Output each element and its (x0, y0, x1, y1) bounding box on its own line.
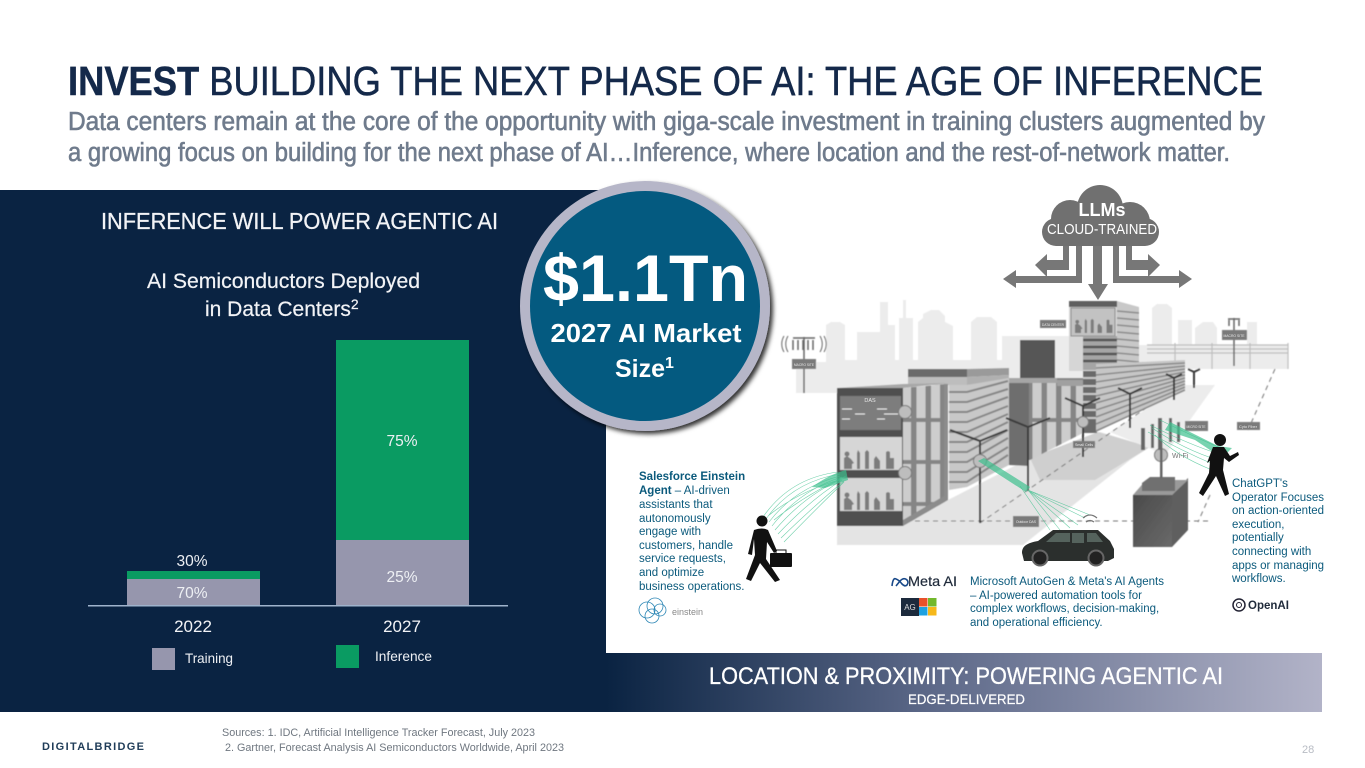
icon: wi-fi signal (1083, 515, 1097, 522)
callout: Microsoft and Meta agents: complex workflows, decision-making, (970, 603, 1159, 615)
occupants (844, 450, 894, 469)
callout: market size circle: $1.1Tn (543, 241, 748, 315)
callout: Microsoft and Meta agents: Microsoft AutoGen & Meta's AI Agents (970, 576, 1164, 588)
callout: Salesforce Einstein Agent: and optimize (639, 567, 704, 579)
callout: market size circle: 1 (665, 355, 674, 372)
DAS lines (842, 409, 898, 419)
logo: AutoGen and Microsoft (901, 598, 936, 616)
subtitle (68, 108, 1265, 167)
callout: Salesforce Einstein Agent: Salesforce Einstein (639, 471, 745, 483)
bar chart (88, 340, 508, 636)
logo: AutoGen and Microsoft: AG (904, 603, 916, 612)
illustration labels: DAS (864, 398, 876, 404)
bar chart: 25% (386, 569, 418, 586)
bar chart: 30% (176, 553, 208, 570)
callout: Salesforce Einstein Agent (639, 471, 745, 593)
callout: Microsoft and Meta agents: and operational efficiency. (970, 617, 1103, 629)
icon: LLM cloud: LLMs (1078, 200, 1126, 220)
callout: ChatGPT Operator: workflows. (1231, 573, 1286, 585)
macro antenna icons (782, 318, 1240, 393)
illustration labels (794, 322, 1258, 524)
bar chart: 75% (386, 433, 418, 450)
sources (222, 727, 564, 754)
callout: Salesforce Einstein Agent: customers, handle (639, 540, 733, 552)
illustration labels: MICRO SITE (1186, 424, 1206, 429)
sources: 2. Gartner, Forecast Analysis AI Semiconductors Worldwide, April 2023 (225, 742, 564, 754)
callout: ChatGPT Operator: execution, (1232, 519, 1284, 531)
skyline (796, 300, 1288, 393)
long building (1083, 371, 1097, 433)
callout: Microsoft and Meta agents (970, 576, 1164, 629)
illustration labels: Small Cells (1075, 442, 1093, 447)
callout: ChatGPT Operator: on action-oriented (1232, 505, 1324, 517)
tower (1069, 301, 1117, 371)
icon: car (1022, 530, 1114, 566)
dark rooftop box (1020, 340, 1055, 378)
cabinet (1172, 478, 1188, 547)
bar chart: 70% (176, 585, 208, 602)
ground (837, 432, 1150, 545)
logo: DigitalBridge: DIGITALBRIDGE (42, 741, 144, 753)
callout: ChatGPT Operator: Operator Focuses (1232, 492, 1324, 504)
icon: walking businessman (746, 516, 792, 582)
speaker nodes (898, 406, 1168, 480)
callout: Salesforce Einstein Agent: business operations. (639, 581, 744, 593)
panel: navy chart background (0, 190, 606, 712)
chart title (147, 270, 420, 321)
antenna (1141, 418, 1180, 478)
front building (837, 388, 903, 526)
icon: LLM cloud (1042, 185, 1159, 246)
callout: Microsoft and Meta agents: – AI-powered automation tools for (970, 590, 1142, 602)
chart title: 2 (351, 296, 359, 312)
illustration labels: MACRO SITE (1224, 333, 1245, 338)
icon: LLM cloud: CLOUD-TRAINED (1047, 221, 1157, 238)
signal beams (763, 420, 1225, 542)
callout: Salesforce Einstein Agent: assistants that (639, 499, 713, 511)
logo: Meta AI: Meta AI (908, 573, 957, 589)
illustration labels: Cyto Fiber (1239, 424, 1258, 429)
callout: Salesforce Einstein Agent: Agent – AI-driven (639, 485, 730, 497)
power lines (1147, 343, 1288, 369)
callout: market size circle (520, 181, 770, 431)
panel heading: INFERENCE WILL POWER AGENTIC AI (101, 208, 498, 234)
callout: Salesforce Einstein Agent: engage with (639, 526, 701, 538)
banner: location and proximity: LOCATION & PROXIMITY: POWERING AGENTIC AI (709, 663, 1223, 690)
subtitle: a growing focus on building for the next phase of AI…Inference, where location and the rest-of-network matter. (68, 139, 1230, 167)
illustration labels: DATA CENTER (1042, 322, 1064, 327)
chart legend (152, 645, 432, 670)
callout: Salesforce Einstein Agent: service requests, (639, 553, 726, 565)
sources: Sources: 1. IDC, Artificial Intelligence Tracker Forecast, July 2023 (222, 727, 535, 739)
callout: ChatGPT Operator: ChatGPT's (1232, 478, 1288, 490)
glass building (1010, 378, 1085, 460)
arrows from cloud (1003, 246, 1192, 300)
illustration: smart city (782, 300, 1288, 547)
logo: einstein: einstein (672, 607, 703, 617)
illustration labels: Outdoor DAS (1016, 519, 1036, 524)
subtitle: Data centers remain at the core of the opportunity with giga-scale investment in training clusters augmented by (68, 108, 1265, 136)
callout: Salesforce Einstein Agent: autonomously (639, 513, 711, 525)
logo: einstein (639, 598, 703, 623)
banner: location and proximity: EDGE-DELIVERED (908, 691, 1025, 707)
chart title: in Data Centers (205, 298, 351, 321)
illustration labels: MACRO SITE (794, 362, 814, 367)
logo: OpenAI (1233, 599, 1289, 612)
logo: OpenAI: OpenAI (1248, 600, 1289, 612)
icon: person with phone (1199, 434, 1239, 496)
page number: 28 (1302, 744, 1314, 756)
wi-fi label: Wi-Fi (1172, 453, 1189, 460)
callout: market size circle: 2027 AI Market (550, 318, 742, 348)
callout: ChatGPT Operator: connecting with (1232, 546, 1311, 558)
chart legend: Training (185, 650, 233, 666)
bar chart: 2022 (174, 617, 212, 636)
chart legend: Inference (375, 648, 432, 664)
callout: market size circle: Size (615, 355, 665, 383)
callout: ChatGPT Operator (1231, 478, 1324, 585)
title: INVEST BUILDING THE NEXT PHASE OF AI: THE AGE OF INFERENCE (68, 58, 1263, 104)
banner: location and proximity (606, 653, 1322, 712)
callout: ChatGPT Operator: apps or managing (1232, 560, 1324, 572)
street lamps (950, 369, 1200, 523)
callout: ChatGPT Operator: potentially (1232, 532, 1284, 544)
bar chart: 2027 (383, 617, 421, 636)
chart title: AI Semiconductors Deployed (147, 270, 420, 293)
second building (908, 369, 967, 377)
